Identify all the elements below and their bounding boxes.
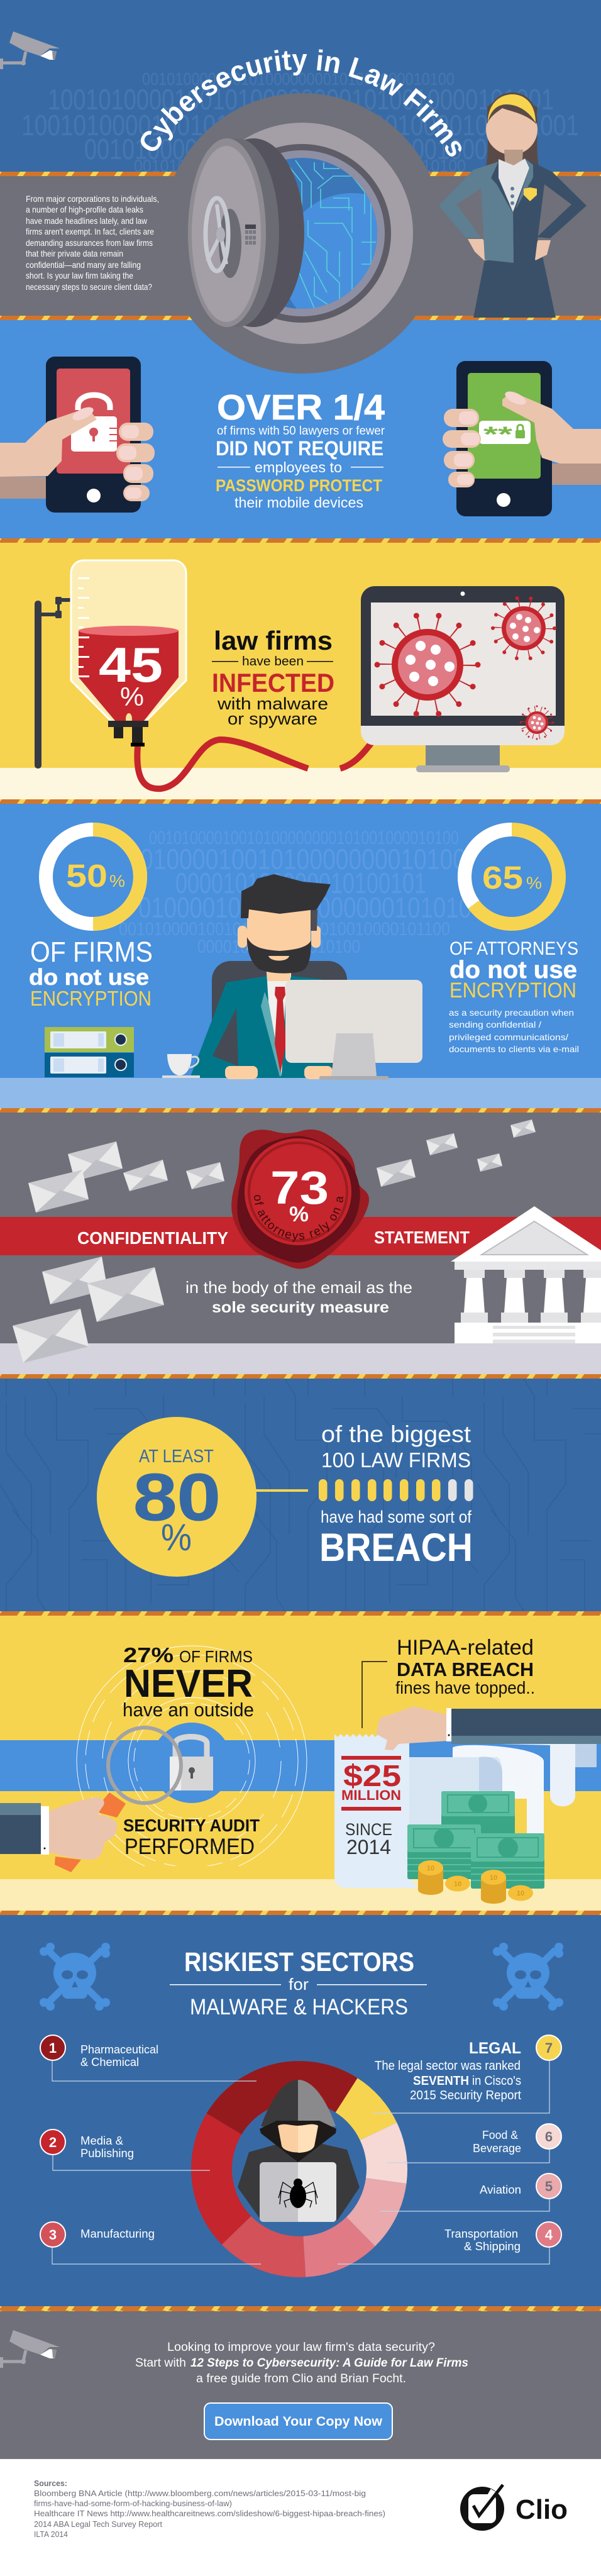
callout: 5 aviation: Aviation — [480, 2184, 521, 2196]
text: of attorneys do not use encryption: as a security precaution when — [449, 1008, 574, 1018]
callout: 6 food — [473, 2124, 561, 2155]
panel: mobile password protection — [0, 318, 601, 541]
text: of attorneys do not use encryption — [449, 938, 579, 1054]
red ribbon — [0, 1217, 601, 1255]
text: of firms do not use encryption: OF FIRMS — [30, 936, 153, 968]
text: of firms do not use encryption: do not use — [29, 964, 149, 990]
text: have had some sort of breach: BREACH — [319, 1526, 473, 1570]
text: of the biggest 100 law firms: 100 LAW FIRMS — [321, 1448, 471, 1472]
panel: call to action — [0, 2306, 601, 2459]
heading: RISKIEST SECTORS — [184, 1947, 414, 1977]
sources: Sources: — [34, 2479, 67, 2488]
donut chart: sectors — [191, 2061, 407, 2277]
call to action text: 12 Steps to Cybersecurity: A Guide for Law Firms — [190, 2357, 468, 2370]
text: 27% of firms never: SECURITY AUDIT — [123, 1816, 260, 1835]
text: of the biggest 100 law firms — [321, 1421, 471, 1472]
yellow circle: at least 80%: AT LEAST — [139, 1446, 214, 1467]
donut chart: 65%: % — [526, 874, 542, 892]
red tube — [137, 740, 372, 789]
callout: 1 pharmaceutical: Pharmaceutical — [80, 2043, 158, 2056]
icon: security camera — [0, 31, 60, 69]
intro paragraph: firms aren't exempt. In fact, clients are — [26, 226, 154, 236]
IV drip with 45% — [35, 560, 186, 769]
right phone with green password screen: ** — [483, 423, 513, 447]
ribbon text — [77, 1228, 470, 1248]
receipt: $25 — [343, 1760, 401, 1793]
left phone with red locked screen — [46, 357, 141, 513]
Clio logo — [460, 2485, 568, 2531]
gold coins: 10 — [517, 1890, 524, 1897]
download button: Download Your Copy Now — [214, 2414, 383, 2429]
callout: 1 pharmaceutical — [40, 2035, 158, 2068]
heading: MALWARE & HACKERS — [190, 1995, 408, 2019]
callout: 3 manufacturing: 3 — [49, 2227, 57, 2243]
sources: firms-have-had-some-form-of-hacking-business-of-law) — [34, 2499, 232, 2508]
intro paragraph: short. Is your law firm taking the — [26, 270, 133, 280]
text: of firms do not use encryption: ENCRYPTION — [30, 987, 152, 1010]
statistic text: over 1/4: their mobile devices — [234, 494, 363, 511]
text: have had some sort of breach — [319, 1507, 473, 1570]
concentric scan rings — [77, 1646, 307, 1876]
padlock — [152, 1723, 232, 1803]
text: 27% of firms never: PERFORMED — [124, 1835, 255, 1859]
desktop computer — [285, 980, 422, 1080]
vault — [162, 93, 443, 374]
binary code background: 00101000010010100000001010010000101100 — [119, 919, 450, 940]
text: of attorneys do not use encryption: privileged communications/ — [449, 1032, 568, 1042]
text: of firms do not use encryption — [29, 936, 153, 1010]
IV drip with 45%: % — [120, 682, 144, 711]
donut chart: 50% — [46, 830, 140, 924]
sources: 2014 ABA Legal Tech Survey Report — [34, 2519, 162, 2529]
statistic text: over 1/4 — [216, 387, 385, 511]
callout: 6 food: 6 — [545, 2129, 553, 2145]
wax seal with 73%: of attorneys rely on a — [254, 1195, 343, 1241]
statistic text: over 1/4: OVER 1/4 — [217, 387, 385, 428]
cash stacks — [407, 1791, 544, 1889]
donut chart: 50%: % — [109, 872, 125, 891]
call to action text: a free guide from Clio and Brian Focht. — [196, 2372, 406, 2385]
yellow circle: at least 80% — [97, 1417, 256, 1577]
sources — [34, 2479, 385, 2539]
lawyer at desk — [190, 874, 347, 1079]
intro paragraph — [26, 194, 159, 292]
callout: 4 transportation — [444, 2222, 561, 2253]
wax seal with 73%: % — [289, 1202, 309, 1226]
virus: small — [521, 706, 553, 739]
text: email body — [185, 1278, 412, 1316]
statistic text: over 1/4: employees to — [255, 459, 342, 475]
sources: ILTA 2014 — [34, 2529, 68, 2539]
binary code background: 00101000010010100000000101001000010100 — [142, 69, 455, 89]
call to action text: Looking to improve your law firm's data security? — [167, 2341, 435, 2354]
sources: Bloomberg BNA Article (http://www.bloomberg.com/news/articles/2015-03-11/most-big — [34, 2489, 366, 2498]
text: email body: sole security measure — [212, 1299, 389, 1316]
panel: 80% breach — [0, 1374, 601, 1611]
text: 27% of firms never: have an outside — [123, 1699, 254, 1721]
gold coins — [418, 1860, 533, 1904]
ten-bar pill chart — [319, 1479, 473, 1501]
binary code background — [21, 69, 579, 175]
hooded hacker with laptop — [238, 2080, 360, 2222]
callout: 4 transportation: 4 — [545, 2227, 553, 2243]
binary code background: 00101000010010100000000101001000010100 — [149, 828, 459, 848]
intro paragraph: necessary steps to secure client data? — [26, 282, 152, 292]
text: 27% of firms never: OF FIRMS — [179, 1647, 253, 1666]
courthouse — [451, 1206, 601, 1343]
callout: 5 aviation — [480, 2174, 561, 2199]
callout: 4 transportation: & Shipping — [464, 2240, 521, 2253]
gold coins: 10 — [427, 1865, 434, 1872]
virus: medium — [493, 597, 554, 659]
intro paragraph: confidential—and many are falling — [26, 260, 141, 270]
callout: 2 media: Publishing — [80, 2147, 134, 2160]
text: HIPAA-related data breach — [395, 1636, 535, 1697]
statistic text: over 1/4: PASSWORD PROTECT — [216, 476, 382, 495]
text: 45% infected: with malware — [217, 694, 328, 713]
binary code background: 00101000010010100000000101001000 — [84, 133, 487, 165]
binary code background: 00101000010010100000000101001000010100 — [134, 156, 466, 175]
panel: hero header — [0, 0, 601, 374]
text: have had some sort of breach: have had some sort of — [321, 1507, 471, 1526]
sources: Healthcare IT News http://www.healthcareitnews.com/slideshow/6-biggest-hipaa-breach-fines) — [34, 2509, 385, 2518]
text: of the biggest 100 law firms: of the biggest — [321, 1421, 471, 1447]
panel: riskiest sectors — [0, 1911, 601, 2306]
virus: large — [377, 614, 478, 715]
IV drip with 45%: 45 — [99, 637, 163, 692]
wax seal with 73% — [231, 1130, 369, 1269]
envelopes — [13, 1119, 536, 1363]
connector line — [256, 1489, 308, 1492]
callout: 1 pharmaceutical: & Chemical — [80, 2056, 139, 2068]
text: of attorneys do not use encryption: do not use — [449, 957, 577, 984]
binary code background — [119, 828, 471, 957]
hand with magnifying glass — [0, 1728, 181, 1872]
gold coins: 10 — [454, 1880, 461, 1888]
receipt: MILLION — [341, 1787, 401, 1803]
statistic text: over 1/4: DID NOT REQUIRE — [216, 437, 383, 460]
callout: 7 legal: The legal sector was ranked — [375, 2059, 521, 2073]
text: email body: in the body of the email as the — [185, 1278, 412, 1297]
vault door — [188, 138, 304, 327]
security guard woman — [439, 92, 587, 318]
callout: 7 legal: in Cisco's — [472, 2074, 521, 2088]
download button — [204, 2403, 392, 2440]
yellow circle: at least 80%: 80 — [133, 1460, 221, 1535]
callout: 7 legal — [375, 2035, 561, 2102]
callout: 6 food: Beverage — [473, 2142, 521, 2155]
donut chart: 50%: 50 — [66, 858, 108, 894]
panel: security audit and HIPAA fines — [0, 1611, 601, 1911]
callout: 7 legal: LEGAL — [469, 2040, 521, 2057]
text: 45% infected — [212, 626, 334, 728]
binary code background: 0100001001010000000010100 — [140, 843, 466, 875]
panel: confidentiality statement — [0, 1108, 601, 1374]
callout: 2 media — [40, 2129, 134, 2160]
callout: 6 food: Food & — [482, 2129, 518, 2141]
text: 45% infected: or spyware — [228, 709, 317, 728]
text: HIPAA-related data breach: DATA BREACH — [397, 1658, 534, 1680]
receipt: 2014 — [346, 1836, 391, 1858]
right phone with green password screen — [456, 361, 552, 516]
text: 27% of firms never: NEVER — [124, 1662, 253, 1706]
text: of attorneys do not use encryption: sending confidential / — [449, 1019, 541, 1030]
icon: security camera — [0, 2330, 60, 2368]
right hand pressing phone — [443, 389, 601, 487]
callout: 1 pharmaceutical: 1 — [49, 2040, 57, 2056]
receipt — [334, 1734, 418, 1888]
gold coins: 10 — [490, 1874, 497, 1882]
binary code background: 01000010010100000000101010 — [138, 891, 471, 924]
hand holding receipt — [376, 1706, 601, 1750]
callout: 5 aviation: 5 — [545, 2179, 553, 2194]
intro paragraph: that their private data remain — [26, 248, 123, 258]
paper rolls — [409, 1744, 597, 1862]
call to action text: Start with — [135, 2357, 186, 2370]
wax seal with 73%: 73 — [270, 1162, 329, 1214]
vault opening with circuit board — [285, 158, 377, 309]
text: of attorneys do not use encryption: documents to clients via e-mail — [449, 1044, 579, 1054]
bracket line — [362, 1662, 387, 1728]
icon: skull left — [40, 1943, 110, 2011]
Clio logo: Clio — [516, 2494, 568, 2525]
monitor with viruses — [361, 586, 565, 772]
text: HIPAA-related data breach: fines have topped.. — [395, 1678, 535, 1697]
text: 45% infected: law firms — [214, 626, 333, 655]
binary code background: 0000100000000010100 — [197, 936, 360, 957]
panel: footer — [0, 2459, 601, 2576]
intro paragraph: have made headlines lately, and law — [26, 216, 148, 226]
icon: spider — [278, 2179, 317, 2208]
text: of attorneys do not use encryption: ENCRYPTION — [449, 979, 576, 1002]
text: 27% of firms never — [123, 1643, 260, 1859]
callout: 7 legal: SEVENTH — [413, 2074, 469, 2088]
heading — [170, 1947, 427, 2019]
leader lines — [52, 2060, 549, 2264]
title: Cybersecurity in Law Firms — [141, 49, 461, 157]
panel: encryption — [0, 799, 601, 1108]
callout: 7 legal: 2015 Security Report — [410, 2089, 521, 2102]
intro paragraph: demanding assurances from law firms — [26, 238, 153, 248]
receipt: SINCE — [345, 1820, 392, 1839]
heading: for — [289, 1975, 309, 1994]
callout: 2 media: 2 — [49, 2135, 57, 2150]
text: 45% infected: INFECTED — [212, 668, 334, 697]
callout: 2 media: Media & — [80, 2135, 123, 2147]
binary code background: 000010100000010100101 — [175, 867, 426, 899]
yellow circle: at least 80%: % — [161, 1516, 192, 1558]
callout: 3 manufacturing: Manufacturing — [80, 2228, 155, 2240]
coffee cup — [162, 1054, 200, 1078]
callout: 4 transportation: Transportation — [444, 2228, 518, 2240]
ribbon text: CONFIDENTIALITY — [77, 1228, 228, 1248]
text: HIPAA-related data breach: HIPAA-related — [397, 1636, 534, 1660]
icon: skull right — [493, 1943, 563, 2011]
call to action text — [135, 2341, 468, 2385]
ribbon text: STATEMENT — [374, 1228, 470, 1247]
donut chart: 65%: 65 — [482, 860, 523, 896]
text: 27% of firms never: 27% — [123, 1643, 174, 1667]
statistic text: over 1/4: of firms with 50 lawyers or fewer — [217, 425, 385, 438]
callout: 7 legal: 7 — [545, 2040, 553, 2056]
donut chart: 65% — [465, 830, 559, 924]
text: of attorneys do not use encryption: OF ATTORNEYS — [449, 938, 578, 959]
binders — [45, 1027, 134, 1077]
callout: 3 manufacturing — [40, 2222, 155, 2247]
intro paragraph: a number of high-profile data leaks — [26, 204, 143, 214]
panel: infected with malware — [0, 538, 601, 800]
left hand holding phone — [0, 404, 155, 501]
text: 45% infected: have been — [242, 655, 304, 669]
intro paragraph: From major corporations to individuals, — [26, 194, 159, 204]
